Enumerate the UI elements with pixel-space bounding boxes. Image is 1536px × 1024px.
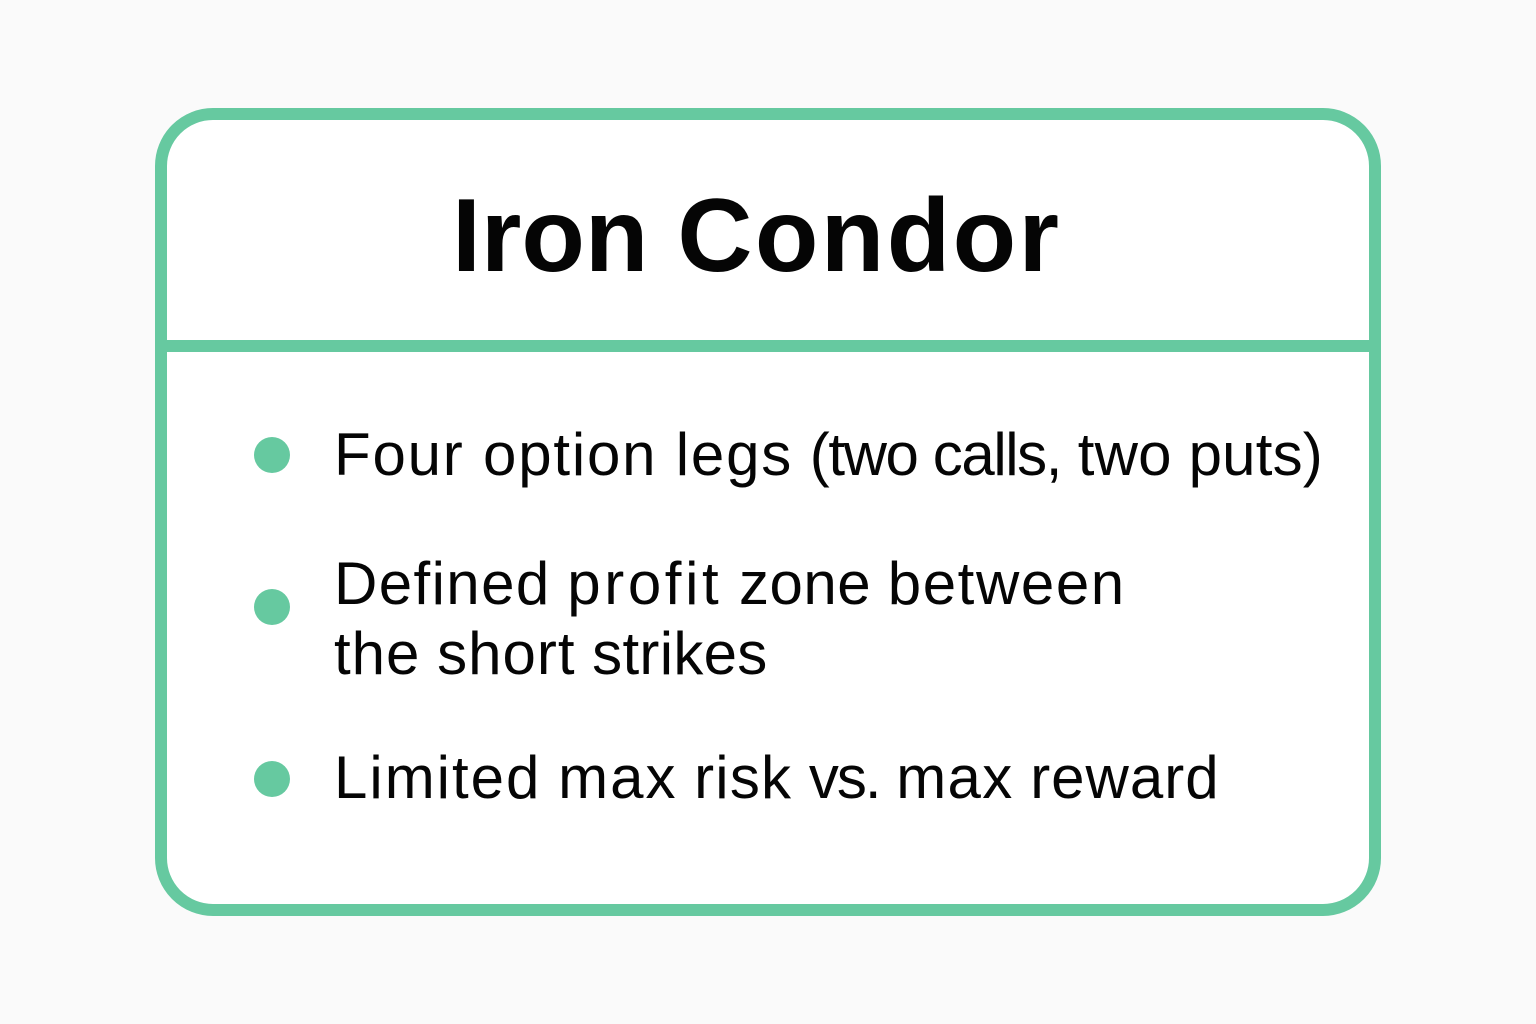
text: bullet 2 xyxy=(334,550,1126,687)
panel: iron condor card xyxy=(155,108,1381,916)
text: bullet 2: Defined profit zone between xyxy=(334,550,1126,617)
header divider xyxy=(161,340,1375,352)
icon: bullet 1 xyxy=(254,437,290,473)
icon: bullet 3 xyxy=(254,761,290,797)
icon: bullet 2 xyxy=(254,589,290,625)
title: Iron Condor xyxy=(452,178,1061,294)
text: bullet 1: Four option legs (two calls, two puts) xyxy=(334,421,1323,488)
text: bullet 3: Limited max risk vs. max reward xyxy=(334,744,1220,811)
text: bullet 2: the short strikes xyxy=(334,620,768,687)
